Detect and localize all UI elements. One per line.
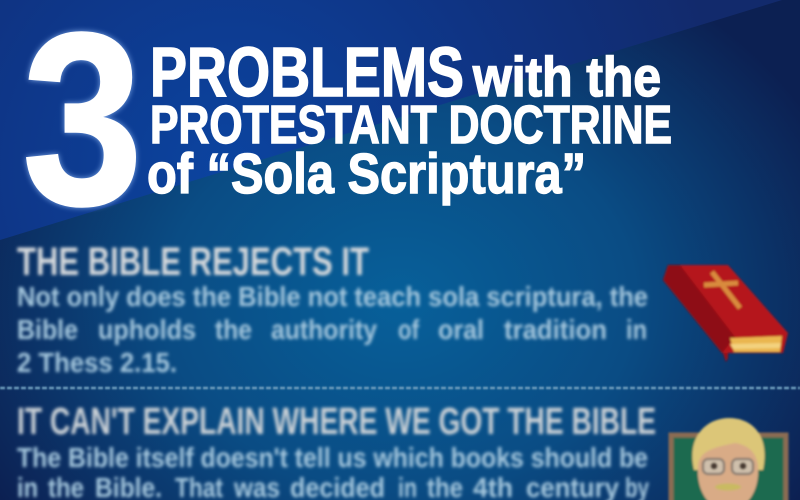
title line 3: of “Sola Scriptura”: [147, 142, 586, 206]
section 2: it can't explain where we got the Bible: [17, 401, 656, 500]
body text 1: Not only does the Bible not teach sola scriptura, the: [17, 281, 648, 312]
body text 1: oral: [438, 314, 484, 345]
face: [698, 443, 758, 500]
body text 2: [17, 442, 649, 500]
icon: red Bible: [663, 265, 788, 362]
title line 1: PROBLEMS: [150, 33, 464, 111]
divider: [0, 387, 800, 389]
glasses: [703, 459, 753, 474]
body text 1: Bible: [17, 314, 78, 345]
body text 1: of: [398, 314, 420, 345]
heading 1: THE BIBLE REJECTS IT: [17, 240, 369, 284]
body text 1: upholds: [98, 314, 196, 345]
section 1: the Bible rejects it: [17, 240, 648, 378]
chalkboard: [671, 435, 786, 500]
body text 2: The Bible itself doesn't tell us which books should be: [17, 442, 648, 473]
body text 1: [17, 281, 648, 378]
title line 2: PROTESTANT DOCTRINE: [150, 95, 672, 155]
moustache: [715, 484, 741, 490]
body text 1: authority: [271, 314, 377, 345]
title line 1: with the: [472, 45, 661, 108]
body text 1: 2 Thess 2.15.: [17, 347, 177, 378]
body text 1: the: [215, 314, 252, 345]
hair: [692, 418, 765, 470]
title: [22, 0, 672, 257]
icon: teacher at chalkboard: [671, 418, 786, 500]
body text 1: tradition: [504, 314, 607, 345]
body text 1: in: [626, 314, 647, 345]
